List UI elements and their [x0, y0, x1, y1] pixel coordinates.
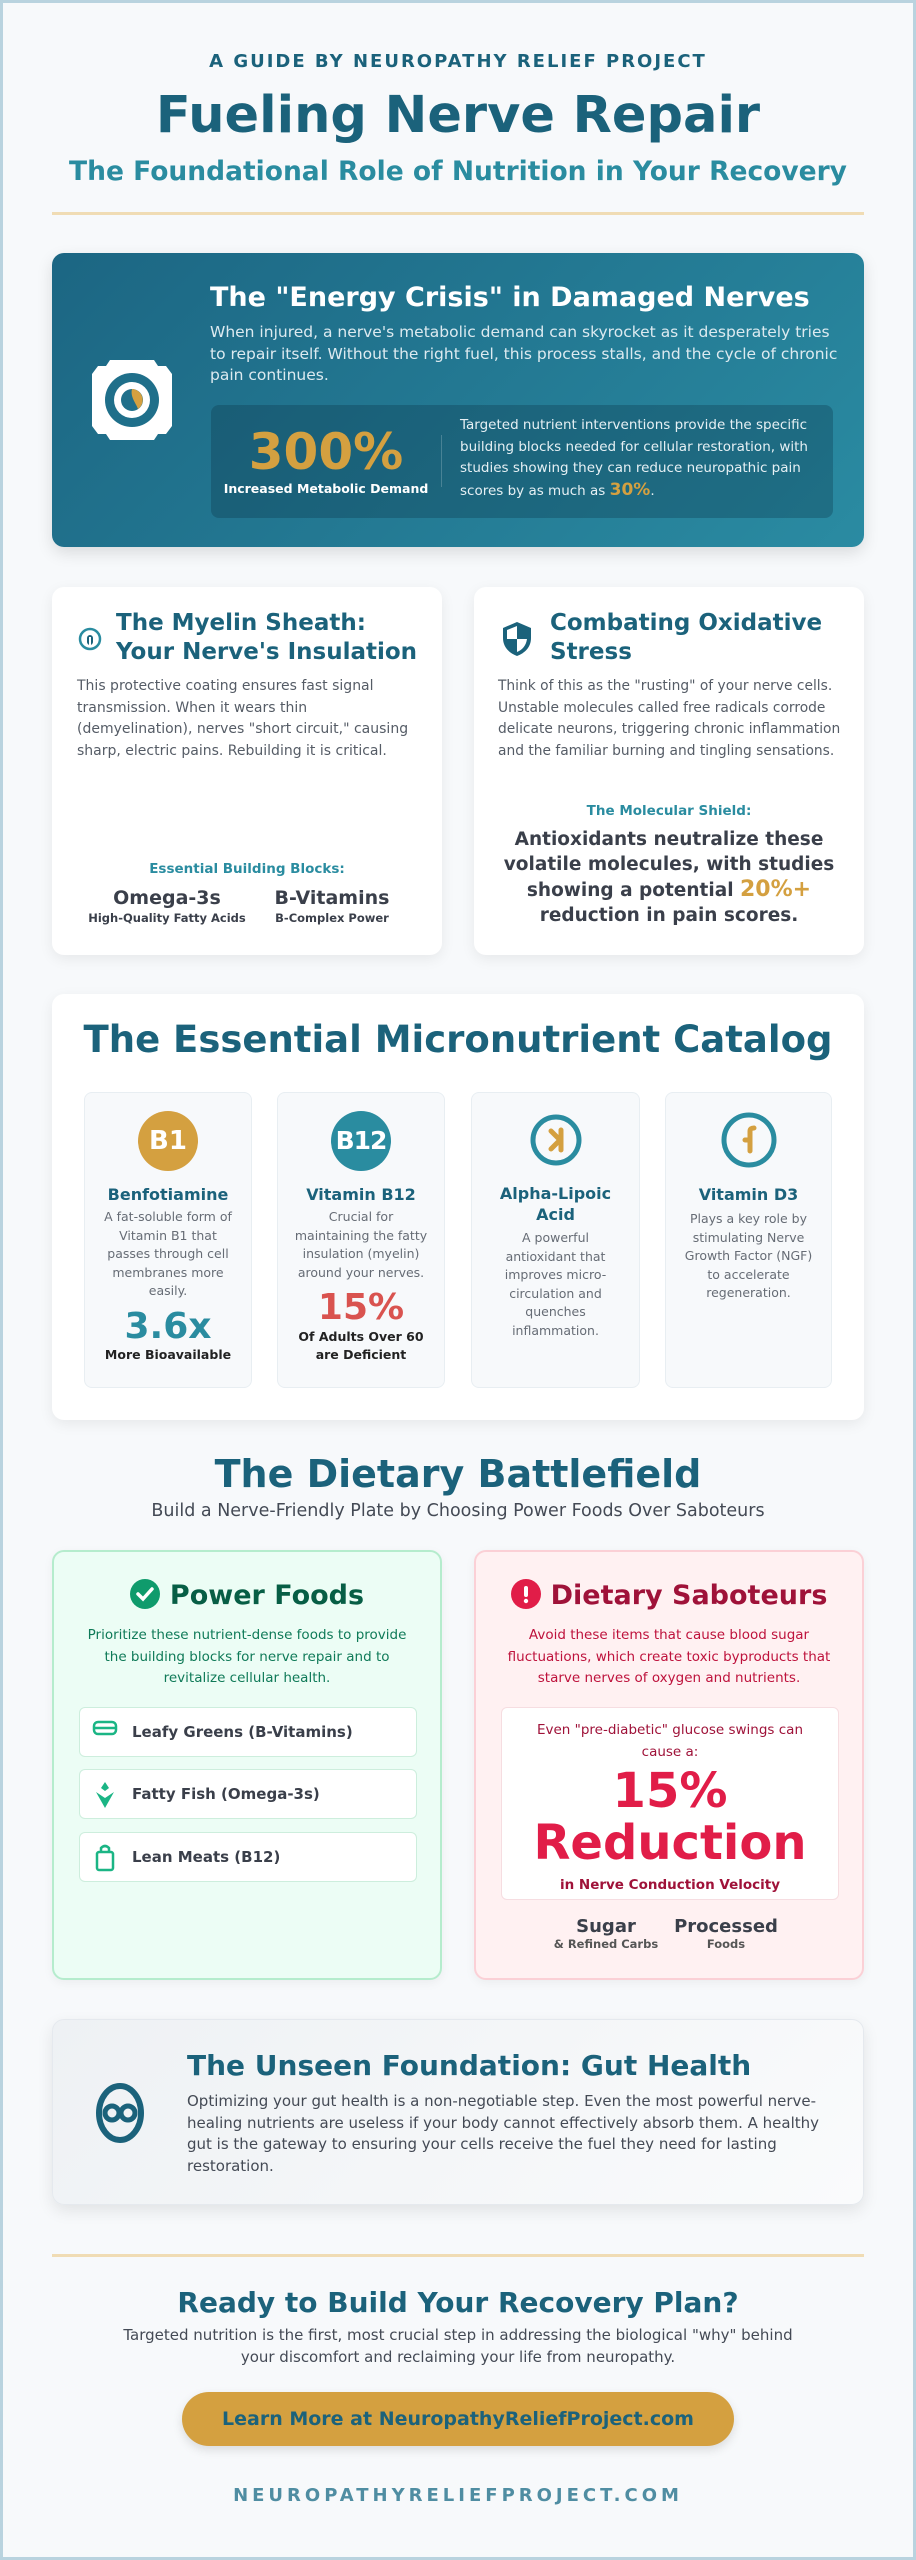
card: benfotiamine: More Bioavailable [105, 1346, 231, 1362]
stat description: Targeted nutrient interventions provide the specific building blocks needed for cellular restoration, with studies showing they can reduce neuropathic pain scores by as much as 30%. [460, 417, 808, 500]
heading: The "Energy Crisis" in Damaged Nerves [210, 282, 810, 313]
card: benfotiamine: 3.6x [124, 1306, 212, 1346]
icon: myelin [78, 628, 102, 650]
items: & Refined Carbs [554, 1937, 658, 1951]
card: benfotiamine [84, 1092, 252, 1388]
heading [550, 610, 822, 665]
heading: The Unseen Foundation: Gut Health [187, 2049, 751, 2082]
panel: dietary saboteurs: Processed [674, 1916, 778, 1937]
icon: energy gauge [92, 360, 172, 440]
stat box [501, 1707, 839, 1900]
CTA text: Targeted nutrition is the first, most crucial step in addressing the biological "why" behind your discomfort and reclaiming your life from neuropathy. [123, 2326, 793, 2366]
text: Avoid these items that cause blood sugar fluctuations, which create toxic byproducts that starve nerves of oxygen and nutrients. [508, 1627, 830, 1686]
card: vitamin D3: Vitamin D3 [699, 1185, 798, 1204]
molecular shield: The Molecular Shield: [587, 803, 751, 819]
stat box: 15% [613, 1763, 727, 1819]
section subtitle: Build a Nerve-Friendly Plate by Choosing Power Foods Over Saboteurs [151, 1501, 765, 1521]
heading with check icon: Power Foods [170, 1580, 364, 1611]
icon: D3 [722, 1112, 776, 1168]
heading: The Myelin Sheath: [116, 610, 366, 636]
icon: B12 [331, 1111, 391, 1171]
card: vitamin D3 [665, 1092, 832, 1388]
panel: myelin sheath: B-Complex Power [275, 911, 389, 925]
card: vitamin B12: are Deficient [316, 1347, 406, 1362]
card: benfotiamine: A fat-soluble form of Vitamin B1 that passes through cell membranes more easily. [104, 1209, 232, 1298]
header kicker: A GUIDE BY NEUROPATHY RELIEF PROJECT [209, 51, 707, 72]
items [554, 1916, 658, 1951]
panel: dietary saboteurs: Foods [707, 1937, 745, 1951]
heading: Stress [550, 639, 632, 665]
panel: micronutrient catalog [52, 994, 864, 1420]
card: vitamin B12: 15% [318, 1287, 404, 1328]
card: benfotiamine: Benfotiamine [108, 1185, 228, 1204]
panel: myelin sheath: Omega-3s [113, 887, 221, 909]
icon: B12: B12 [336, 1126, 386, 1155]
text block: When injured, a nerve's metabolic demand can skyrocket as it desperately tries to repair itself. Without the right fuel, this process stalls, and the cycle of chronic pain continues. [210, 323, 837, 384]
card: alpha-lipoic acid: Alpha-Lipoic [500, 1184, 611, 1203]
item: lean meats: Lean Meats (B12) [132, 1848, 280, 1866]
building blocks: Essential Building Blocks: [149, 861, 345, 877]
icon: shield [503, 622, 531, 656]
heading [116, 610, 417, 665]
heading with alert icon: Dietary Saboteurs [551, 1580, 827, 1611]
icon: ALA [530, 1114, 582, 1166]
panel: myelin sheath: High-Quality Fatty Acids [88, 911, 246, 925]
text: Optimizing your gut health is a non-negotiable step. Even the most powerful nerve-healing nutrients are useless if your body cannot effectively absorb them. A healthy gut is the gateway to ensuring your cells receive the fuel they need for lasting restoration. [187, 2092, 819, 2174]
text block: This protective coating ensures fast signal transmission. When it wears thin (demyelination), nerves "short circuit," causing sharp, electric pains. Rebuilding it is critical. [77, 678, 408, 758]
stat box: Reduction [533, 1815, 807, 1871]
panel: dietary saboteurs [474, 1550, 864, 1980]
item: fatty fish: Fatty Fish (Omega-3s) [132, 1785, 320, 1803]
panel: myelin sheath [52, 587, 442, 955]
title: Fueling Nerve Repair [156, 86, 760, 145]
card: vitamin D3: Plays a key role by stimulating Nerve Growth Factor (NGF) to accelerate regeneration. [685, 1211, 812, 1300]
heading: Combating Oxidative [550, 610, 822, 636]
heading: Your Nerve's Insulation [116, 639, 417, 665]
card: alpha-lipoic acid: Acid [536, 1205, 575, 1224]
panel: oxidative stress: Antioxidants neutralize these volatile molecules, with studies showing a potential 20%+ reduction in pain scores. [504, 829, 834, 926]
panel: power foods [52, 1550, 442, 1980]
heading: The Essential Micronutrient Catalog [84, 1018, 832, 1061]
card: vitamin B12: Vitamin B12 [306, 1185, 416, 1204]
button: Learn More at NeuropathyReliefProject.com [222, 2408, 694, 2430]
footer: NEUROPATHYRELIEFPROJECT.COM [233, 2485, 683, 2506]
items: Sugar [576, 1916, 636, 1937]
stat box [211, 405, 833, 518]
panel: oxidative stress [474, 587, 864, 955]
panel: energy crisis [52, 253, 864, 547]
icon: B1 [138, 1111, 198, 1171]
section heading: dietary battlefield: The Dietary Battlefield [215, 1452, 701, 1496]
card: vitamin B12: Of Adults Over 60 [298, 1329, 424, 1344]
icon: B1: B1 [149, 1126, 187, 1156]
stat 300%: Increased Metabolic Demand [224, 481, 428, 496]
card: vitamin B12: Crucial for maintaining the fatty insulation (myelin) around your nerves. [295, 1209, 427, 1280]
item: lean meats [79, 1832, 417, 1882]
text: Prioritize these nutrient-dense foods to provide the building blocks for nerve repair and to revitalize cellular health. [88, 1627, 406, 1686]
panel: gut health [52, 2019, 864, 2205]
card: alpha-lipoic acid [471, 1092, 640, 1388]
button [182, 2392, 734, 2446]
item: fatty fish [79, 1769, 417, 1819]
stat box: Even "pre-diabetic" glucose swings can cause a: [537, 1722, 803, 1760]
stat 300%: 300% [249, 423, 403, 481]
panel: myelin sheath: B-Vitamins [275, 887, 389, 909]
icon: gut [96, 2083, 144, 2143]
card: vitamin B12 [277, 1092, 445, 1388]
subtitle: The Foundational Role of Nutrition in Your Recovery [69, 156, 847, 187]
stat box: in Nerve Conduction Velocity [560, 1877, 780, 1893]
text block: Think of this as the "rusting" of your nerve cells. Unstable molecules called free radicals corrode delicate neurons, triggering chronic inflammation and the familiar burning and tingling sensations. [498, 678, 840, 758]
card: alpha-lipoic acid: A powerful antioxidant that improves micro-circulation and quenches inflammation. [505, 1230, 606, 1338]
item: leafy greens [79, 1707, 417, 1757]
stat 300% [224, 423, 428, 496]
item: leafy greens: Leafy Greens (B-Vitamins) [132, 1723, 353, 1741]
CTA heading: Ready to Build Your Recovery Plan? [177, 2286, 739, 2319]
